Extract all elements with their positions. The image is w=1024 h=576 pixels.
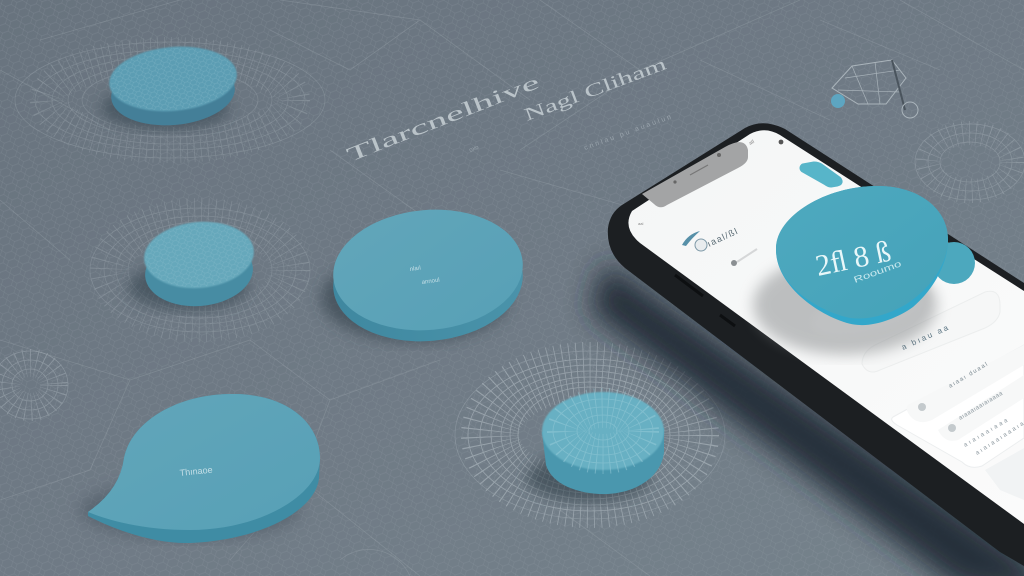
blob headline: 2ﬂ 8 ß [813, 235, 894, 283]
disc: middle left [128, 217, 257, 311]
disc label [409, 266, 440, 286]
card label: a bıau aa [900, 323, 950, 352]
mesh: top left [15, 42, 325, 158]
phone notch [642, 142, 748, 207]
phone: atl [748, 139, 756, 147]
card under blob [862, 291, 1000, 372]
list card: aıaıaaıaaaıa [975, 421, 1024, 457]
disc label: annoul [421, 278, 440, 286]
title text: Nagl Cliham [521, 53, 669, 125]
teal tab [802, 164, 840, 185]
list card: aıaıaaıaaa [963, 417, 1009, 449]
title text [344, 53, 672, 167]
phone body [608, 123, 1024, 566]
list card: aıaaaıaaıaıaaaa [958, 390, 1004, 422]
blob caption: Rooumo [852, 258, 903, 285]
disc: speech drop bottom left [80, 394, 320, 543]
phone [608, 123, 1024, 566]
list card [892, 345, 1024, 467]
mesh: top right [915, 124, 1024, 200]
disc: large centre [321, 202, 528, 349]
mesh: middle left [90, 208, 310, 332]
lower white panel [985, 448, 1024, 500]
disc: top left [101, 42, 240, 130]
disc label: nlaıl [409, 266, 421, 273]
mesh: bottom centre [455, 351, 725, 519]
app header: ıaal/ßl [706, 226, 739, 249]
status marks [779, 140, 783, 144]
blob badge on phone [753, 186, 975, 355]
phone: aal [638, 221, 643, 226]
title text: Tlarcnelhive [344, 71, 543, 167]
list card: aıaaı duaal [948, 362, 989, 390]
phone shadow [590, 262, 1024, 576]
icon: map pin with network [831, 60, 918, 118]
disc: mesh bottom centre [526, 392, 664, 502]
disc label: Thınaoe [179, 465, 213, 478]
title text: oxo [469, 145, 480, 154]
phone screen [628, 130, 1024, 524]
app header [682, 226, 757, 266]
title text: cnnlau pu auaulun [583, 114, 672, 152]
side buttons [675, 275, 735, 326]
mesh: far left [0, 351, 68, 419]
